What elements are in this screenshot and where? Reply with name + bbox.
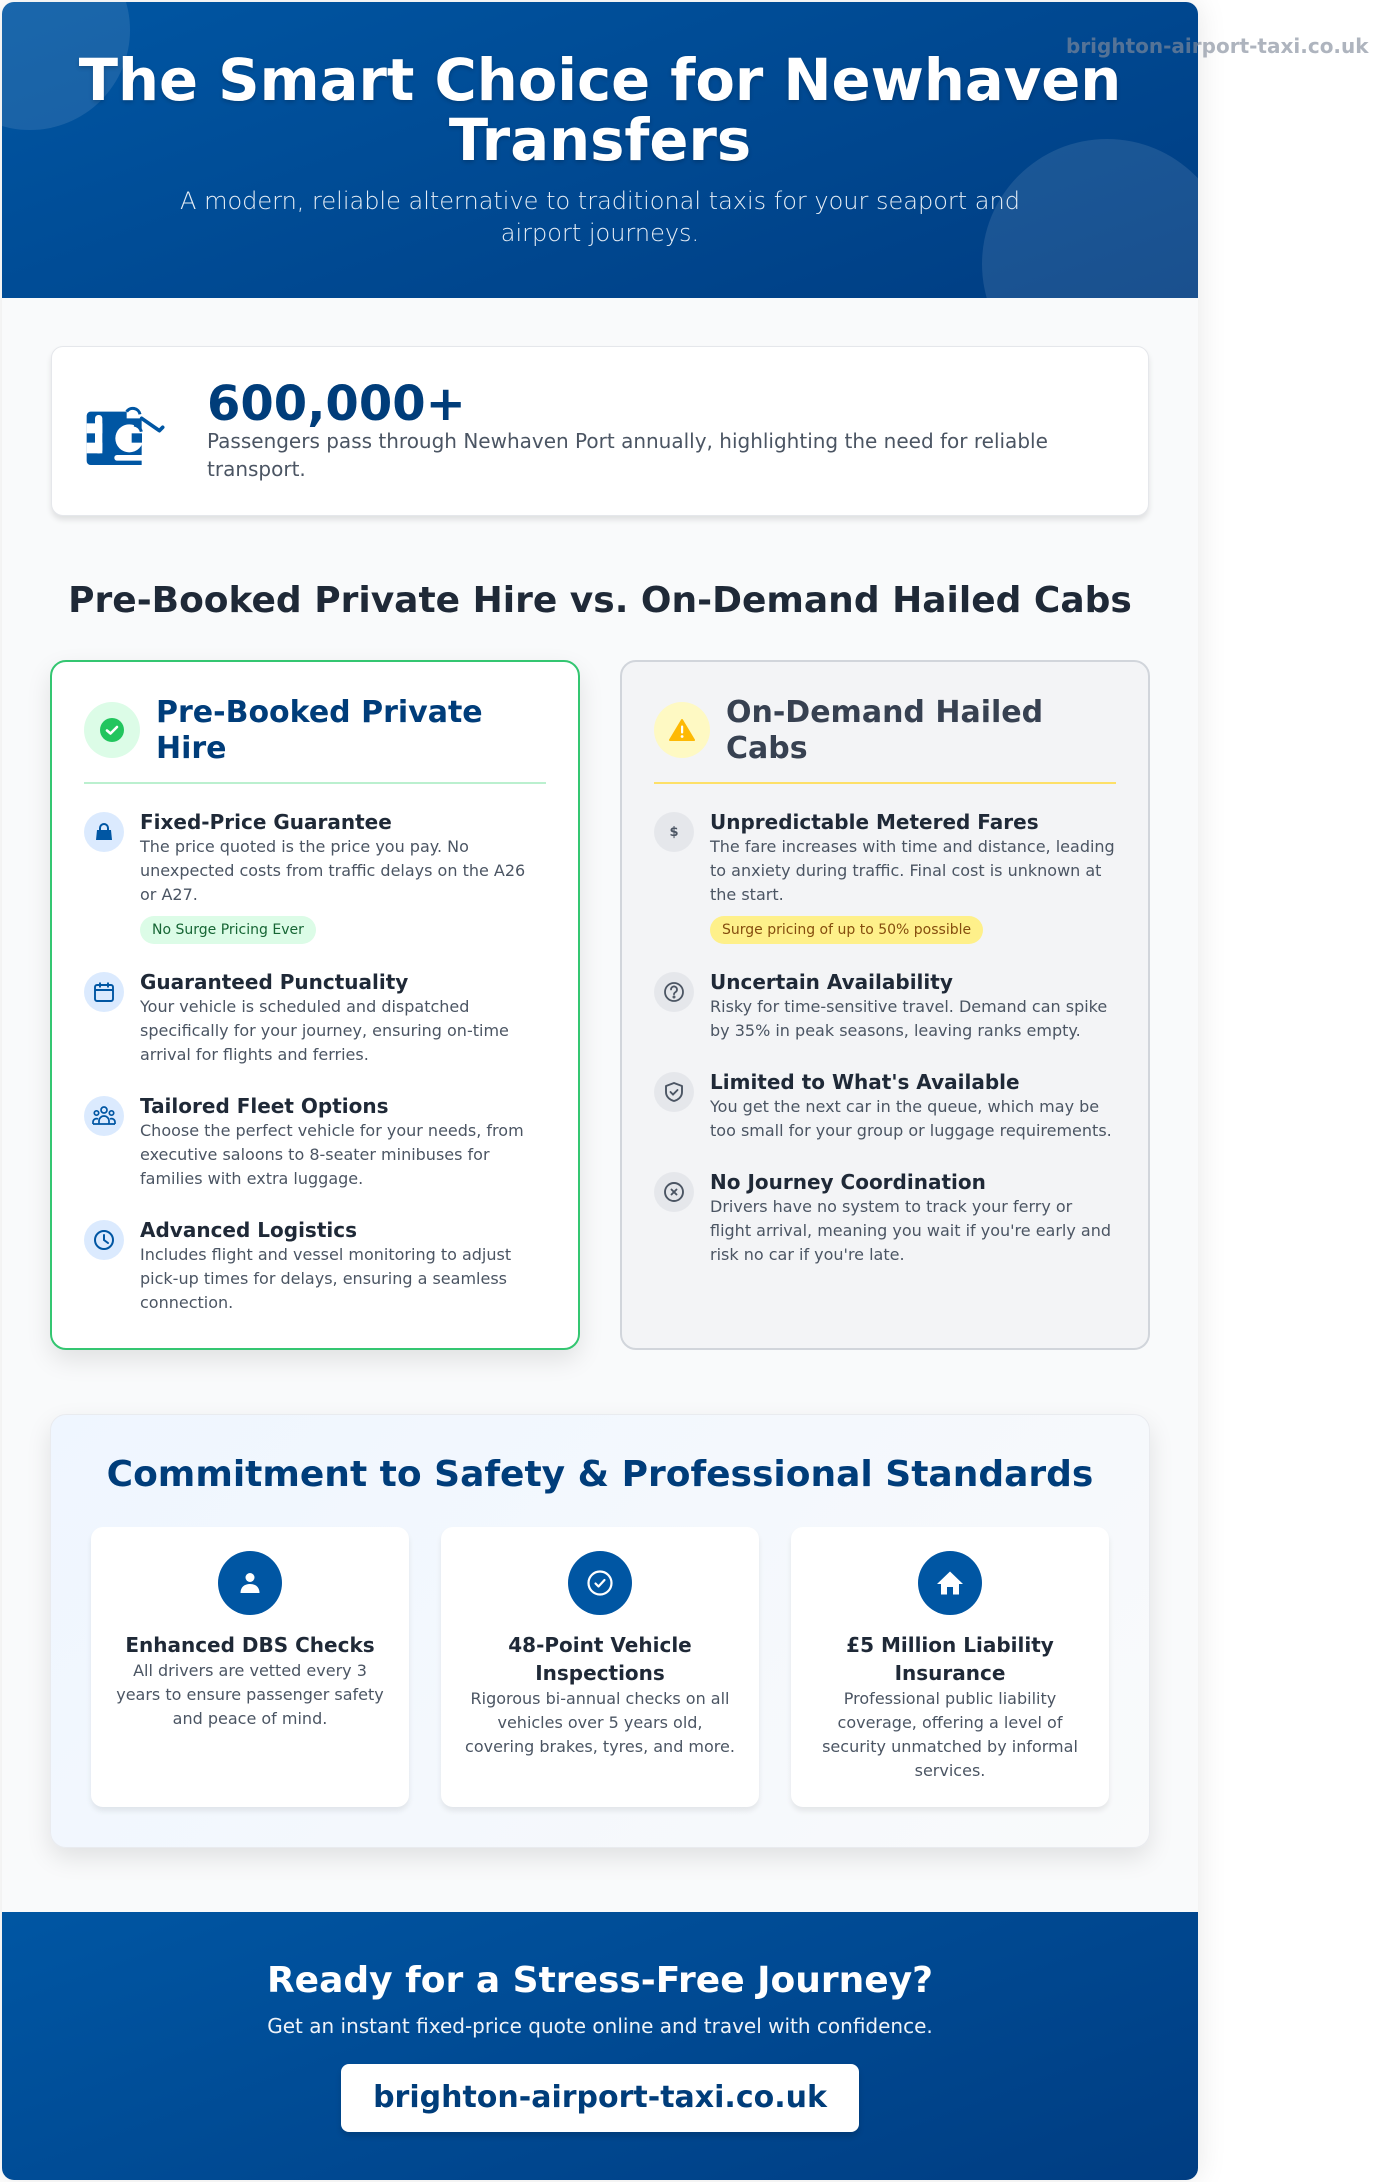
card heading [508, 1633, 692, 1685]
stat description: Passengers pass through Newhaven Port annually, highlighting the need for reliable [207, 429, 1048, 453]
item text [710, 1197, 1111, 1264]
section heading: Pre-Booked Private Hire vs. On-Demand Hailed Cabs [68, 580, 1132, 621]
card heading [846, 1633, 1054, 1685]
icon: check circle [568, 1551, 632, 1615]
item text: The price quoted is the price you pay. No [140, 837, 469, 856]
safety heading: Commitment to Safety & Professional Standards [107, 1454, 1093, 1495]
card text: All drivers are vetted every 3 [133, 1661, 367, 1680]
panel heading: Cabs [726, 731, 808, 766]
panel heading: Hire [156, 731, 227, 766]
icon: house [918, 1551, 982, 1615]
item text: You get the next car in the queue, which may be [710, 1097, 1099, 1116]
item: tailored fleet options [84, 1094, 524, 1188]
icon: bag [84, 812, 124, 852]
item text: too small for your group or luggage requirements. [710, 1121, 1112, 1140]
card text [116, 1661, 384, 1728]
item text: flight arrival, meaning you wait if you're early and [710, 1221, 1111, 1240]
footer heading: Ready for a Stress-Free Journey? [267, 1960, 933, 2001]
badge [710, 916, 983, 944]
stat card [51, 346, 1149, 516]
item text: The fare increases with time and distance, leading [710, 837, 1115, 856]
item text: or A27. [140, 885, 198, 904]
card heading: Enhanced DBS Checks [125, 1633, 375, 1657]
card text: security unmatched by informal [822, 1737, 1078, 1756]
icon: dollar [654, 812, 694, 852]
button: website [341, 2064, 859, 2132]
icon: cross circle [654, 1172, 694, 1212]
stat description [207, 429, 1048, 481]
panel heading [726, 695, 1043, 766]
item text: risk no car if you're late. [710, 1245, 905, 1264]
item text [710, 837, 1115, 904]
icon: dollar: $ [669, 824, 679, 840]
card: DBS checks [91, 1527, 409, 1807]
icon: calendar [84, 972, 124, 1012]
item: guaranteed punctuality [84, 970, 509, 1064]
card heading: Insurance [895, 1661, 1005, 1685]
card text: services. [915, 1761, 985, 1780]
item text [140, 1245, 511, 1312]
icon: warning [654, 702, 710, 758]
item text: pick-up times for delays, ensuring a seamless [140, 1269, 507, 1288]
subtitle [180, 187, 1020, 247]
item text: families with extra luggage. [140, 1169, 363, 1188]
item heading: Guaranteed Punctuality [140, 970, 408, 994]
card text: years to ensure passenger safety [116, 1685, 384, 1704]
card text: Rigorous bi-annual checks on all [470, 1689, 730, 1708]
header banner [2, 2, 1198, 298]
stat number: 600,000+ [207, 376, 466, 432]
icon: shield [654, 1072, 694, 1112]
card text: coverage, offering a level of [838, 1713, 1062, 1732]
subtitle: airport journeys. [501, 219, 699, 247]
card text [465, 1689, 735, 1756]
item text: Drivers have no system to track your ferry or [710, 1197, 1072, 1216]
item: fixed-price guarantee [84, 810, 525, 944]
item text: by 35% in peak seasons, leaving ranks empty. [710, 1021, 1081, 1040]
item heading: No Journey Coordination [710, 1170, 986, 1194]
icon: clock [84, 1220, 124, 1260]
card text: Professional public liability [844, 1689, 1056, 1708]
panel: pre-booked private hire [50, 660, 580, 1350]
panel heading [156, 695, 483, 766]
badge [140, 916, 316, 944]
item text: Your vehicle is scheduled and dispatched [140, 997, 469, 1016]
item text: to anxiety during traffic. Final cost is unknown at [710, 861, 1101, 880]
item text: specifically for your journey, ensuring on-time [140, 1021, 509, 1040]
item text [140, 837, 525, 904]
badge: Surge pricing of up to 50% possible [722, 922, 971, 938]
icon: question [654, 972, 694, 1012]
item heading: Advanced Logistics [140, 1218, 357, 1242]
card text: vehicles over 5 years old, [497, 1713, 703, 1732]
subtitle: A modern, reliable alternative to traditional taxis for your seaport and [180, 187, 1020, 215]
item: limited availability [654, 1070, 1112, 1140]
panel heading: Pre-Booked Private [156, 695, 483, 730]
card text: and peace of mind. [173, 1709, 327, 1728]
card heading: Inspections [535, 1661, 665, 1685]
item text: Includes flight and vessel monitoring to adjust [140, 1245, 511, 1264]
card: liability insurance [791, 1527, 1109, 1807]
item text [140, 997, 509, 1064]
item: no journey coordination [654, 1170, 1111, 1264]
item heading: Fixed-Price Guarantee [140, 810, 392, 834]
item text: the start. [710, 885, 784, 904]
badge: No Surge Pricing Ever [152, 922, 304, 938]
card heading: £5 Million Liability [846, 1633, 1054, 1657]
item heading: Limited to What's Available [710, 1070, 1020, 1094]
item heading: Unpredictable Metered Fares [710, 810, 1039, 834]
item text [140, 1121, 524, 1188]
title [78, 47, 1121, 174]
item text: connection. [140, 1293, 233, 1312]
footer text: Get an instant fixed-price quote online and travel with confidence. [267, 2014, 933, 2038]
panel: safety and standards [50, 1414, 1150, 1848]
panel heading: On-Demand Hailed [726, 695, 1043, 730]
item: unpredictable metered fares [654, 810, 1115, 944]
item: uncertain availability [654, 970, 1107, 1040]
icon: ferry stat [86, 406, 165, 465]
item text: Choose the perfect vehicle for your needs, from [140, 1121, 524, 1140]
item heading: Tailored Fleet Options [140, 1094, 389, 1118]
item text: unexpected costs from traffic delays on the A26 [140, 861, 525, 880]
button: website: brighton-airport-taxi.co.uk [373, 2080, 827, 2115]
icon: group [84, 1096, 124, 1136]
watermark: brighton-airport-taxi.co.uk [1066, 34, 1369, 58]
title: Transfers [449, 107, 751, 174]
item text [710, 997, 1107, 1040]
item text: executive saloons to 8-seater minibuses for [140, 1145, 490, 1164]
panel: on-demand hailed cabs [620, 660, 1150, 1350]
card text [822, 1689, 1078, 1780]
item: advanced logistics [84, 1218, 511, 1312]
item text: Risky for time-sensitive travel. Demand can spike [710, 997, 1107, 1016]
item text: arrival for flights and ferries. [140, 1045, 369, 1064]
title: The Smart Choice for Newhaven [79, 47, 1121, 114]
footer call to action [2, 1912, 1198, 2180]
card heading: 48-Point Vehicle [508, 1633, 692, 1657]
item heading: Uncertain Availability [710, 970, 953, 994]
stat description: transport. [207, 457, 306, 481]
item text [710, 1097, 1112, 1140]
card text: covering brakes, tyres, and more. [465, 1737, 735, 1756]
card: vehicle inspections [441, 1527, 759, 1807]
icon: person [218, 1551, 282, 1615]
icon: green check [84, 702, 140, 758]
